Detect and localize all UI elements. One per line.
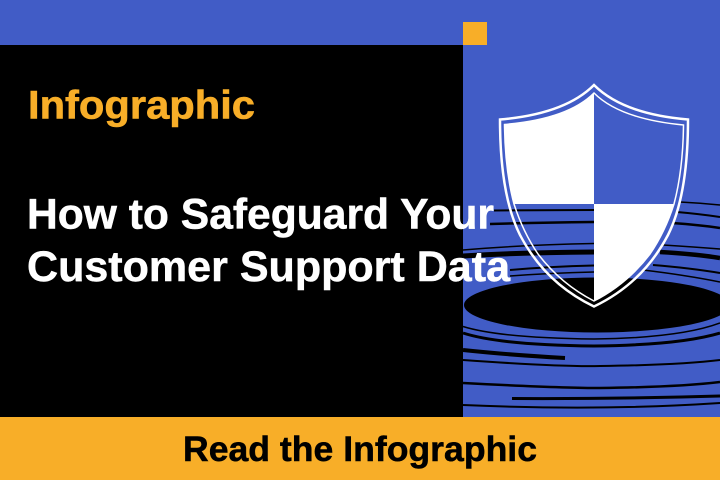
banner: yellow footer xyxy=(0,417,720,480)
label: Infographic: Infographic xyxy=(28,84,255,128)
accent: yellow square xyxy=(463,22,487,45)
title line 2: Customer Support Data xyxy=(27,244,510,291)
shield white upper left quarter xyxy=(504,93,594,204)
illustration: black ripple lines xyxy=(463,202,720,408)
shield inner outline xyxy=(504,93,684,301)
panel: black title panel xyxy=(0,45,463,417)
shield outer outline xyxy=(500,85,688,306)
heading: title xyxy=(27,192,510,291)
icon: shield xyxy=(500,85,688,306)
title line 1: How to Safeguard Your xyxy=(27,192,494,238)
illustration: black ellipse hole xyxy=(464,278,720,332)
shield white lower right quarter xyxy=(594,204,674,301)
button text: call to action: Read the Infographic xyxy=(183,430,537,469)
